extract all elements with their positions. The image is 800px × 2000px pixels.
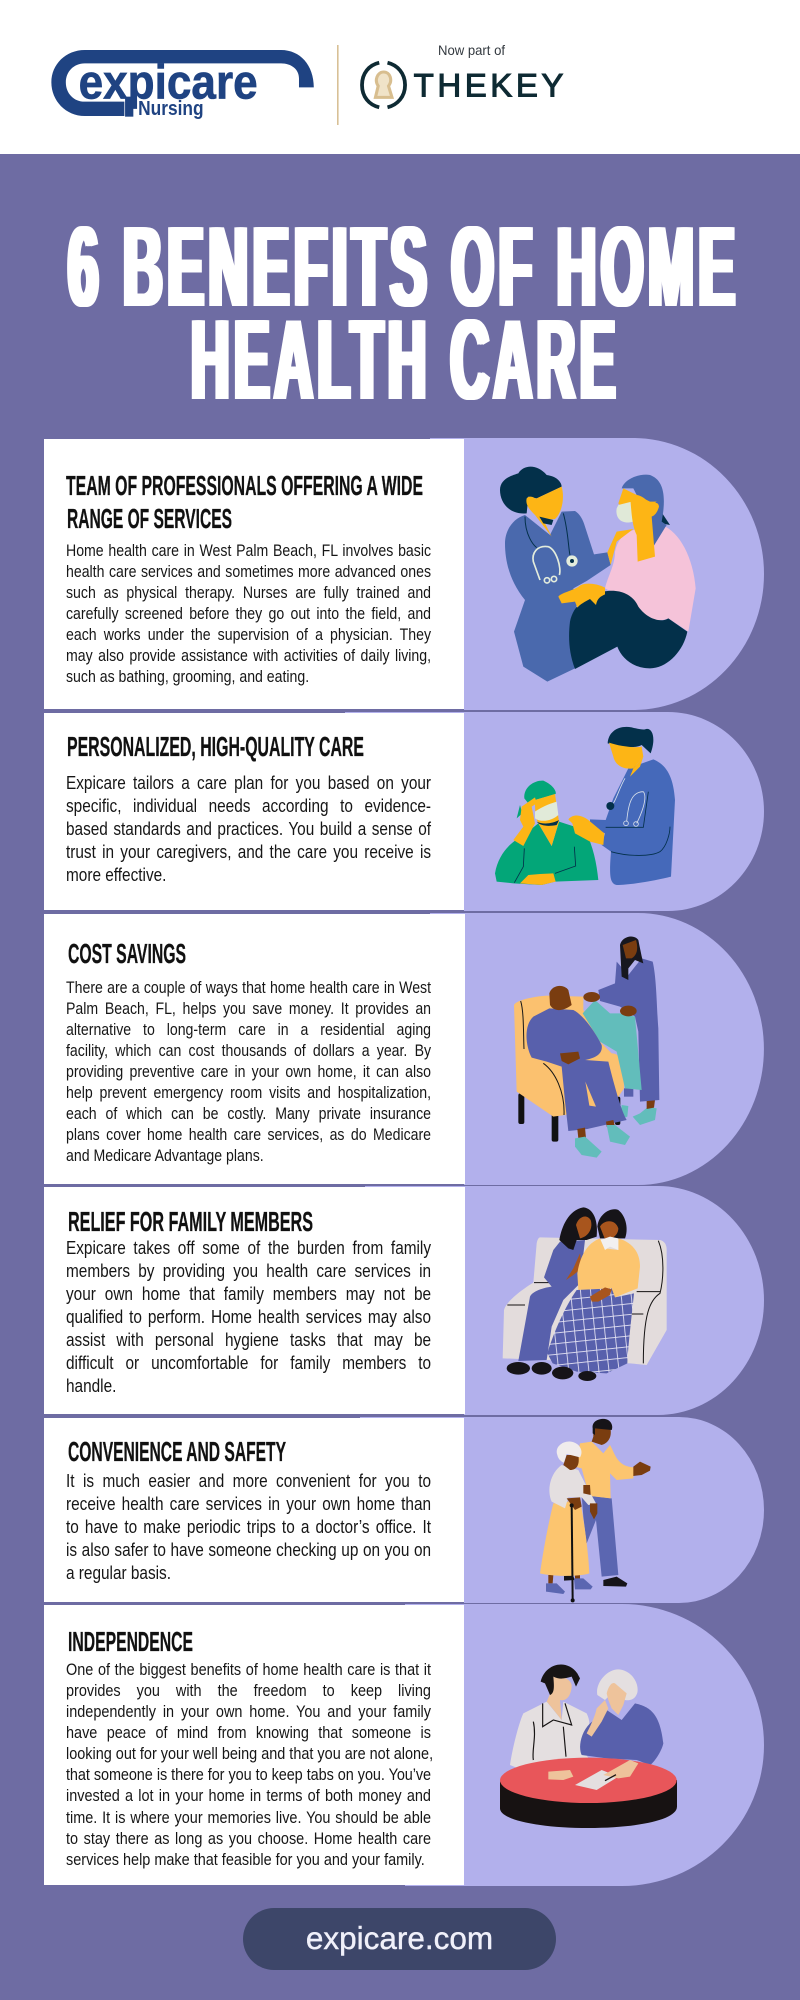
text block: providing preventive care in your own home, it can also [66, 1062, 431, 1081]
text block: Palm Beach, FL, helps you save money. It provides an [66, 999, 431, 1018]
text block: based standards and practices. You build a sense of [66, 818, 431, 839]
text block: each works under the supervision of a physician. They [66, 625, 431, 644]
text: now part of: Now part of [438, 42, 505, 58]
text block: Expicare tailors a care plan for you based on your [66, 772, 431, 793]
text block: facility, which can cost thousands of dollars a year. By [66, 1041, 431, 1060]
text block: provides you with the freedom to keep living [66, 1681, 431, 1700]
text block [66, 1660, 433, 1869]
text block: such as physical therapy. Nurses are fully trained and [66, 583, 431, 602]
text block: time. It is where your memories live. You should be able [66, 1808, 431, 1827]
text block: specific, individual needs according to evidence- [66, 795, 431, 816]
panel: relief for family members [44, 1186, 764, 1415]
text block: qualified to perform. Home health services may also [66, 1306, 431, 1327]
heading: RANGE OF SERVICES [67, 503, 232, 534]
heading: PERSONALIZED, HIGH-QUALITY CARE [67, 731, 364, 762]
text block: help prevent emergency room visits and hospitalization, [66, 1083, 431, 1102]
text block: your own home that family members may not be [66, 1283, 431, 1304]
title: 6 BENEFITS OF HOME [68, 204, 740, 330]
logo: The Key: THEKEY [414, 68, 563, 104]
title: HEALTH CARE [191, 296, 620, 424]
heading: CONVENIENCE AND SAFETY [68, 1436, 286, 1467]
text block: Home health care in West Palm Beach, FL involves basic [66, 541, 431, 560]
text block: trust in your caregivers, and the care you receive is [66, 841, 431, 862]
text block [66, 1237, 431, 1396]
title [67, 204, 740, 424]
icon: caregiver with man in armchair [514, 936, 659, 1158]
text block: a regular basis. [66, 1562, 171, 1583]
logo: The Key [362, 63, 563, 107]
text block: each of which can be costly. Many private insurance [66, 1104, 431, 1123]
text block: looking out for your well being and that you are not alone, [66, 1744, 433, 1763]
text block: receive health care services in your own home than [66, 1493, 431, 1514]
icon: man helping elderly woman with cane [540, 1419, 651, 1602]
text block: invested a lot in your home in terms of both money and [66, 1786, 431, 1805]
text block: that someone is there for you to keep tabs on you. You’ve [66, 1765, 431, 1784]
text block: independently in your own home. You and your family [66, 1702, 431, 1721]
text block [66, 978, 431, 1165]
text block: to stay there as long as you choose. Home health care [66, 1829, 431, 1848]
text block: assist with personal hygiene tasks that may be [66, 1329, 431, 1350]
logo: Expicare Nursing: Nursing [138, 97, 204, 120]
text block: is also safer to have someone checking up on you on [66, 1539, 431, 1560]
text block: services help make that feasible for you and your family. [66, 1850, 425, 1869]
heading [66, 470, 423, 534]
text block: health care services and sometimes more advanced ones [66, 562, 431, 581]
panel: independence [44, 1604, 764, 1886]
text block [66, 772, 432, 885]
text block [66, 1470, 431, 1583]
logo: Expicare Nursing [51, 50, 314, 120]
heading: COST SAVINGS [68, 938, 186, 969]
text block: more effective. [66, 864, 166, 885]
text block: may also provide assistance with activities of daily living, [66, 646, 431, 665]
text block: handle. [66, 1375, 116, 1396]
panel: convenience and safety [44, 1417, 764, 1603]
panel: cost savings [44, 913, 764, 1185]
logo: Expicare Nursing: expicare [79, 55, 258, 109]
text block: alternative to long-term care in a residential aging [66, 1020, 431, 1039]
icon: nurse and seated patient [495, 727, 675, 885]
panel: team of professionals [44, 438, 764, 710]
text block: and Medicare Advantage plans. [66, 1146, 264, 1165]
panel: personalized care [44, 712, 764, 911]
icon: two women on sofa [503, 1207, 667, 1381]
text block: such as bathing, grooming, and eating. [66, 667, 309, 686]
text block: Expicare takes off some of the burden from family [66, 1237, 431, 1258]
text block: members by providing you health care services in [66, 1260, 431, 1281]
text: expicare.com: expicare.com [306, 1920, 493, 1956]
icon: nurse comforting patient [500, 467, 696, 682]
heading: TEAM OF PROFESSIONALS OFFERING A WIDE [66, 470, 423, 501]
heading: INDEPENDENCE [68, 1626, 193, 1657]
header: logos [0, 0, 800, 154]
button: website [243, 1908, 556, 1970]
text block [66, 541, 431, 686]
text block: carefully screened before they go out into the field, and [66, 604, 431, 623]
text block: difficult or uncomfortable for family members to [66, 1352, 431, 1373]
heading: RELIEF FOR FAMILY MEMBERS [68, 1206, 313, 1237]
text block: One of the biggest benefits of home health care is that it [66, 1660, 431, 1679]
text block: There are a couple of ways that home health care in West [66, 978, 431, 997]
text block: to have to make periodic trips to a doctor’s office. It [66, 1516, 431, 1537]
text block: It is much easier and more convenient for you to [66, 1470, 431, 1491]
text block: have peace of mind from knowing that someone is [66, 1723, 431, 1742]
icon: two people at red table [500, 1665, 677, 1828]
text block: plans cover home health care services, as do Medicare [66, 1125, 431, 1144]
